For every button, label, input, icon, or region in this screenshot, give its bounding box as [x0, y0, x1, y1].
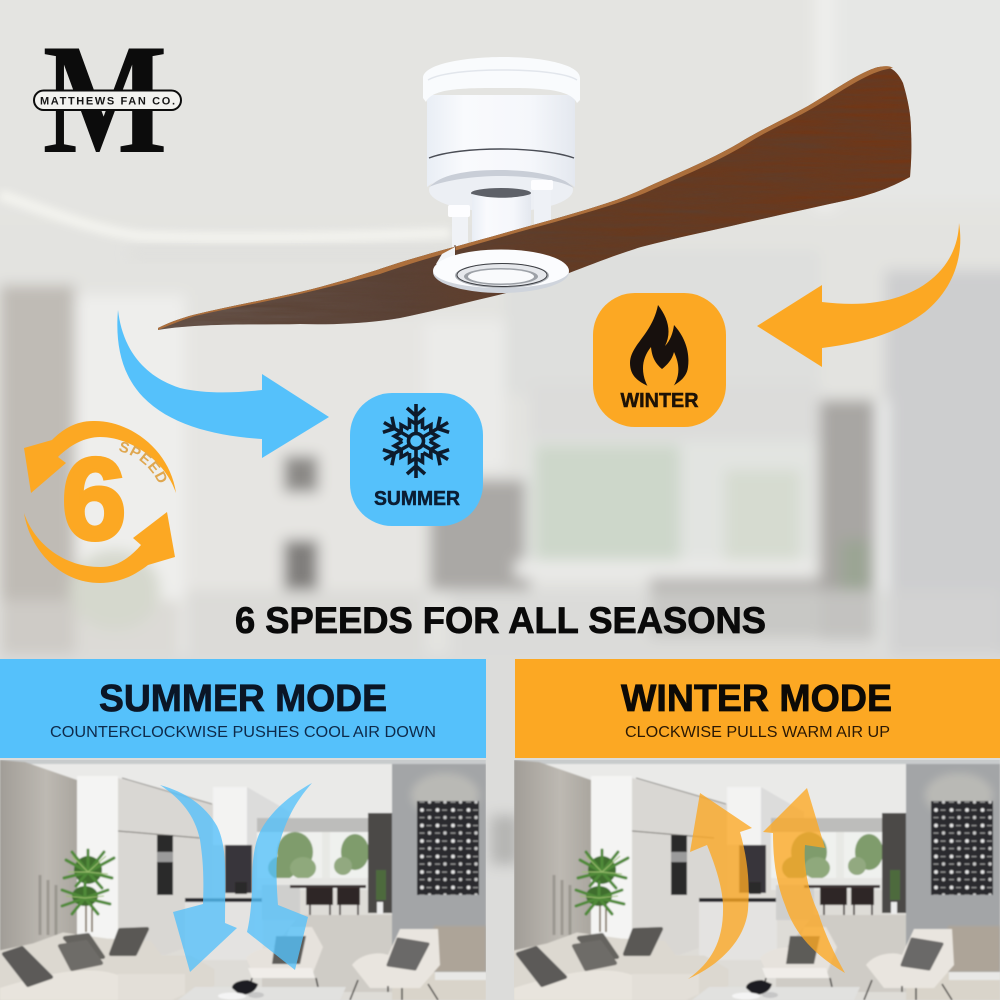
- icon card: summer: [350, 393, 483, 526]
- panel: winter mode: [514, 659, 1000, 1000]
- panel: summer mode: [0, 659, 486, 1000]
- label: winter: WINTER: [620, 390, 699, 412]
- top circular arrow: [24, 421, 176, 493]
- main heading: 6 SPEEDS FOR ALL SEASONS: [235, 600, 766, 641]
- winter heading: WINTER MODE: [621, 678, 892, 720]
- logo: Matthews Fan Co.: MATTHEWS FAN CO.: [40, 96, 175, 108]
- arc for speed label: [118, 451, 161, 490]
- logo: Matthews Fan Co.: M: [42, 12, 168, 187]
- summer room photo: [0, 759, 486, 1000]
- icon: snowflake: [379, 404, 453, 478]
- ceiling fan: [158, 57, 911, 330]
- label: speed: SPEED: [119, 442, 166, 482]
- arrow: summer airflow: [117, 310, 329, 458]
- winter header band: [515, 659, 1000, 758]
- numeral 6: 6: [62, 434, 126, 564]
- fan canopy: [423, 57, 580, 212]
- summer caption: COUNTERCLOCKWISE PUSHES COOL AIR DOWN: [50, 724, 436, 741]
- arrow: winter airflow: [757, 223, 960, 367]
- icon: 6 speed badge: [24, 421, 176, 583]
- summer downward air arrows: [160, 783, 312, 972]
- fan blade: wood: [158, 66, 911, 330]
- label: summer: SUMMER: [374, 488, 461, 510]
- winter upward air arrows: [688, 788, 845, 979]
- summer heading: SUMMER MODE: [99, 678, 387, 720]
- fan mount plate and light: [433, 247, 569, 293]
- icon: flame: [630, 305, 688, 387]
- icon card: winter: [593, 293, 726, 427]
- fan posts and stem: [448, 180, 553, 248]
- winter room photo: [514, 759, 1000, 1000]
- summer header band: [0, 659, 486, 758]
- bottom circular arrow: [24, 512, 175, 583]
- winter caption: CLOCKWISE PULLS WARM AIR UP: [625, 724, 890, 741]
